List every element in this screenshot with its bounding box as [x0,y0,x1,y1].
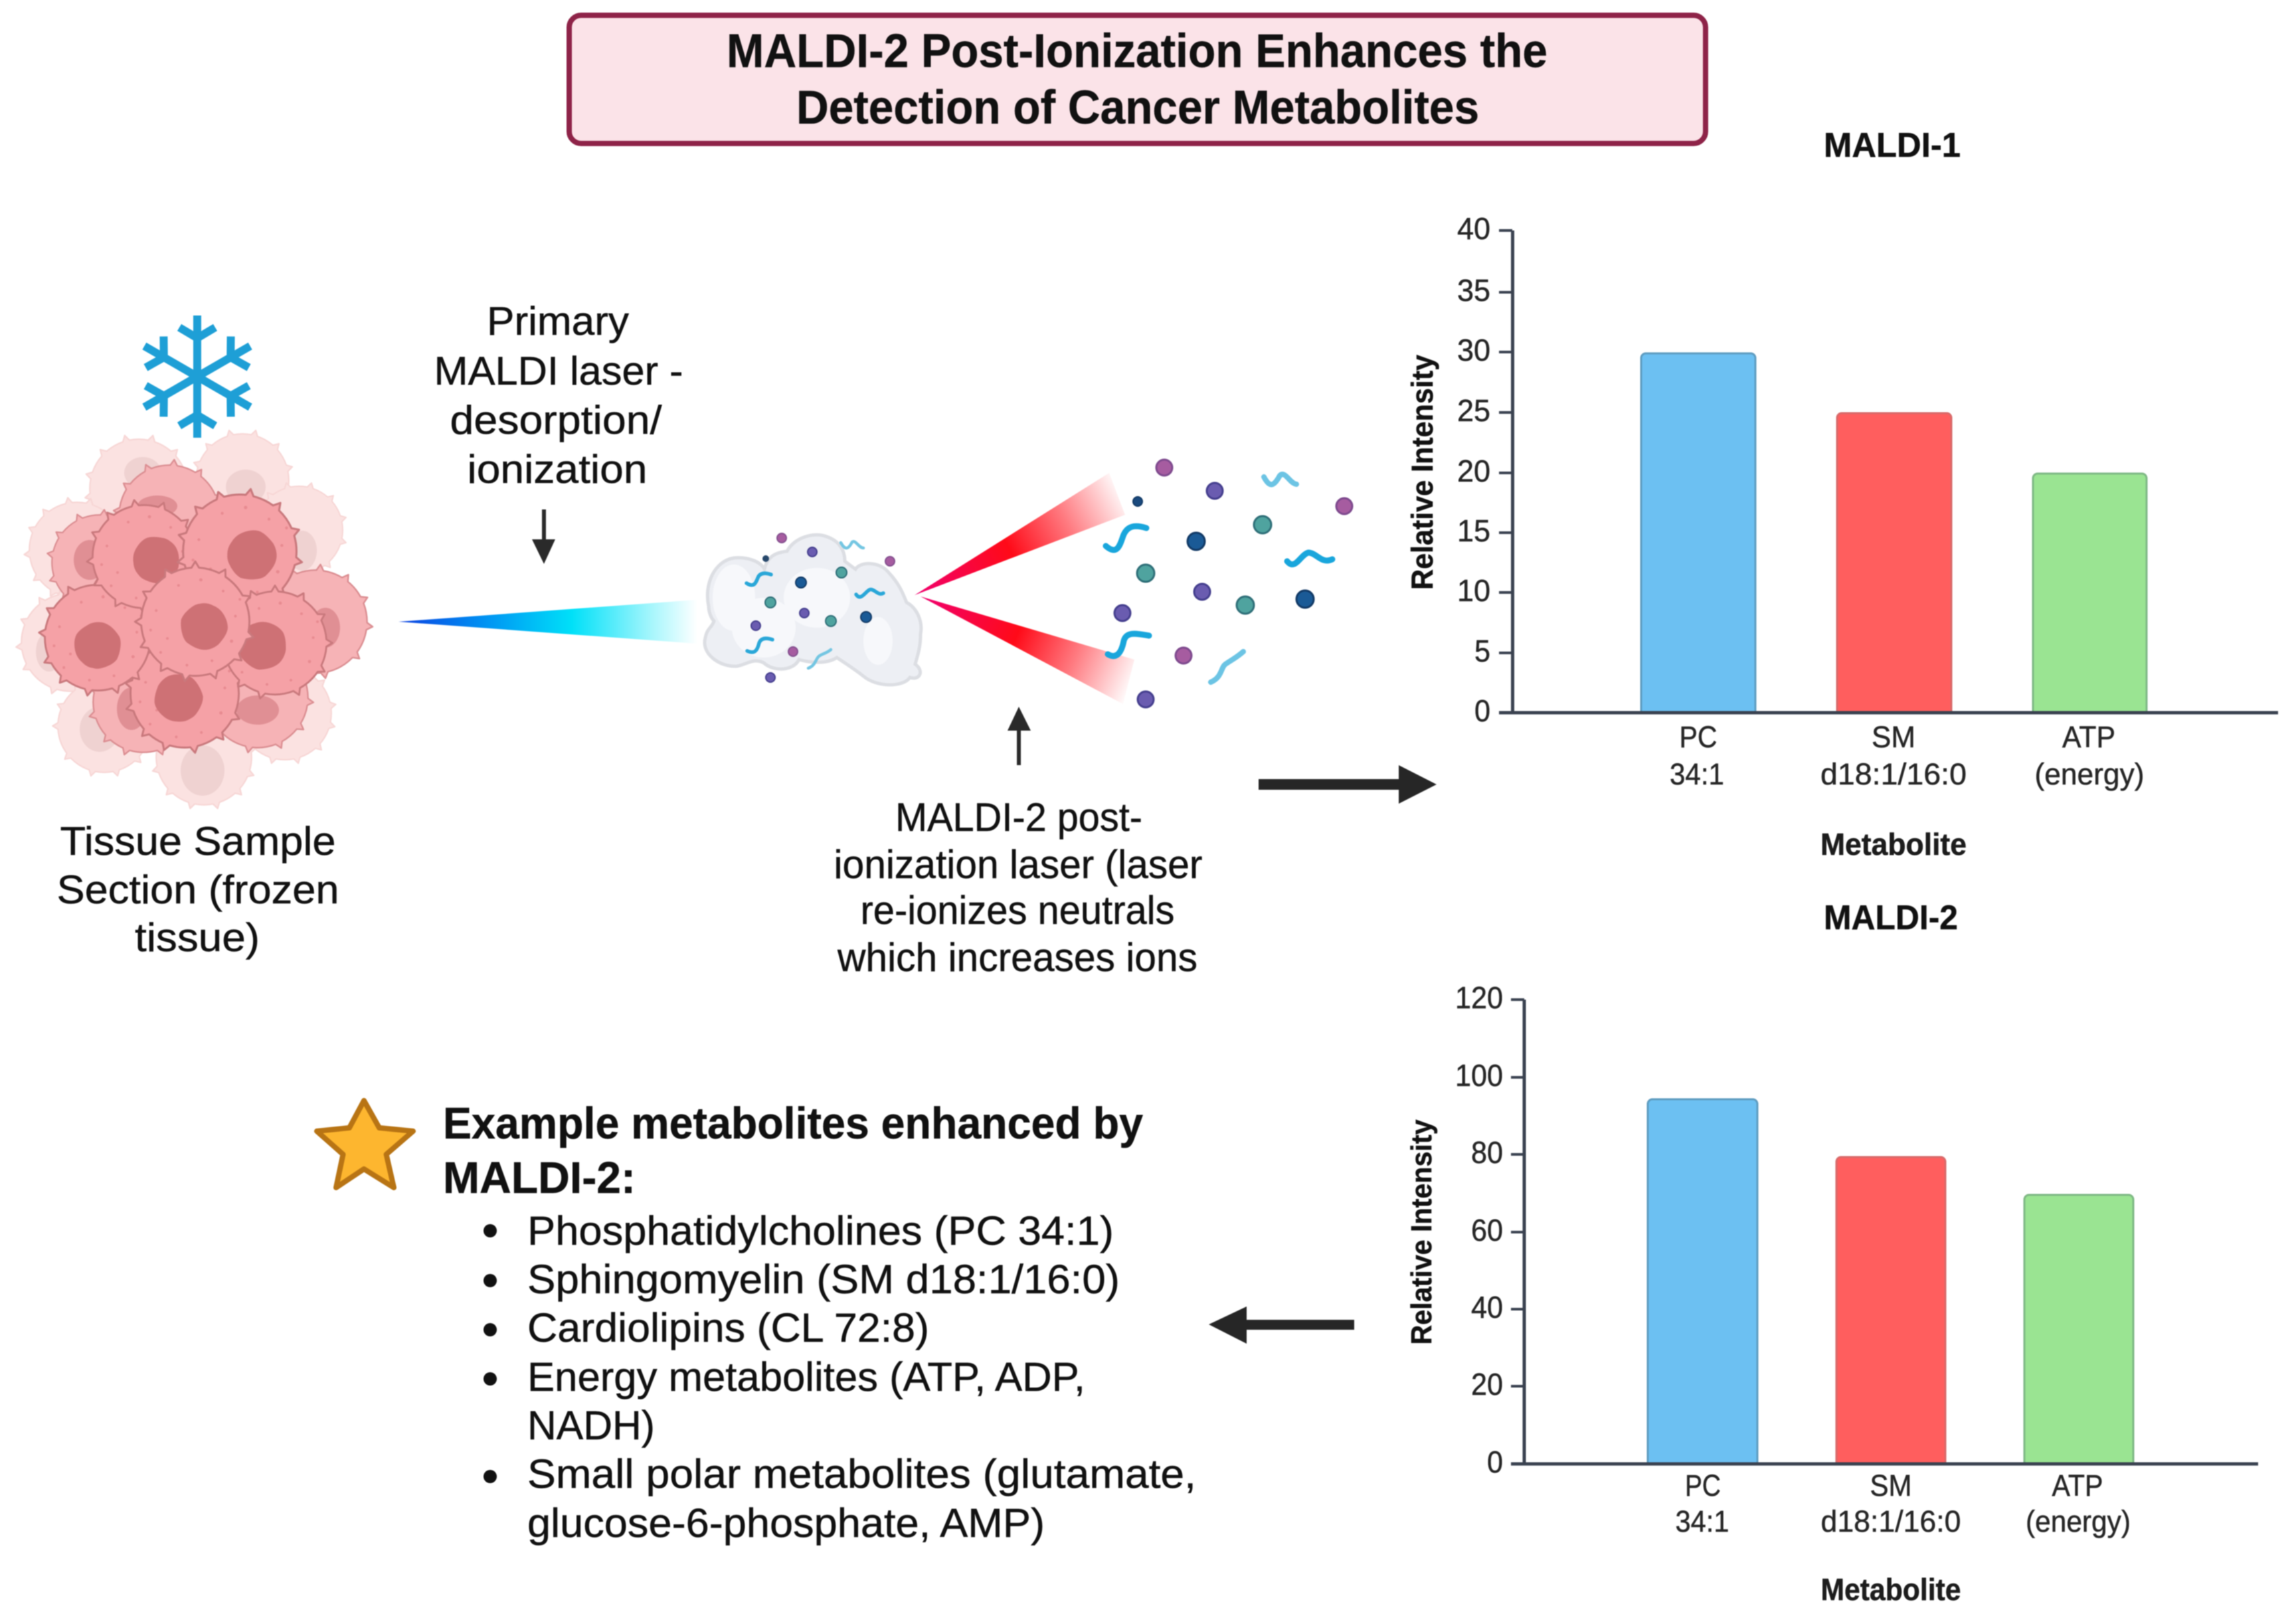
y axis tick labels: 80 [1471,1135,1503,1170]
category labels: (energy) [2035,757,2144,791]
y axis tick labels [1455,980,1503,1479]
left cell [16,556,179,719]
label: tissue sample [57,819,339,960]
label: tissue sample: Section (frozen [57,867,339,912]
list items: Cardiolipins (CL 72:8) [527,1305,929,1350]
list items: NADH) [527,1403,655,1448]
label: MALDI-2 post-ionization laser: which increases ions [837,935,1197,980]
label: tissue sample: Tissue Sample [60,819,336,863]
lower right cell [213,581,337,704]
bars [1648,1099,2133,1464]
list items [527,1208,1196,1546]
y axis tick labels: 40 [1457,211,1490,246]
y axis tick labels: 100 [1455,1058,1503,1093]
red post-ionization laser beams [915,473,1134,704]
list items: Sphingomyelin (SM d18:1/16:0) [527,1257,1120,1302]
y axis tick labels: 25 [1457,393,1490,428]
label: MALDI-2 post-ionization laser: ionization laser (laser [834,842,1202,887]
icon: snowflake [135,315,259,438]
title banner: Detection of Cancer Metabolites [796,82,1479,134]
chart title: MALDI-1 [1824,126,1961,165]
plume cloud with ions [705,533,921,685]
y axis tick labels: 5 [1474,634,1490,668]
x axis title: Metabolite [1821,1572,1961,1607]
chart title: MALDI-2 [1824,899,1958,937]
arrow: up to red laser [1008,707,1031,765]
y axis tick labels: 10 [1457,573,1490,608]
label: primary MALDI laser [434,299,683,492]
x axis title: Metabolite [1820,827,1967,861]
center cell [130,557,260,687]
list heading: Example metabolites enhanced by [443,1099,1143,1148]
arrow: MALDI-2 chart to metabolite list [1209,1306,1354,1344]
bottom cell [111,620,258,766]
ions after post-ionization [1106,460,1352,707]
y axis tick labels: 0 [1474,693,1490,728]
label: tissue sample: tissue) [135,915,260,960]
icon: star [317,1101,413,1188]
category labels [1675,1469,2131,1538]
tumor tissue cell cluster [0,408,389,832]
category labels: d18:1/16:0 [1820,757,1967,791]
chart: MALDI-2 bar chart [1405,899,2258,1607]
title banner: MALDI-2 Post-Ionization Enhances the [727,25,1547,78]
label: MALDI-2 post-ionization laser: re-ionizes neutrals [861,888,1174,933]
y axis tick labels: 35 [1457,273,1490,308]
list items: Energy metabolites (ATP, ADP, [527,1354,1085,1399]
category labels: ATP [2062,720,2115,754]
y axis tick labels: 40 [1471,1290,1503,1324]
category labels: SM [1870,1469,1911,1502]
axes [1511,1000,2258,1464]
label: MALDI-2 post-ionization laser: MALDI-2 post- [895,795,1142,840]
category labels: ATP [2052,1469,2103,1502]
category labels: d18:1/16:0 [1821,1504,1961,1538]
bullets [484,1224,497,1483]
upper left cell [64,477,223,636]
blue primary laser beam [398,600,697,644]
y axis tick labels: 120 [1455,980,1503,1015]
axes [1499,230,2278,713]
y axis tick labels: 20 [1471,1367,1503,1401]
y axis tick labels [1457,211,1490,728]
list heading [443,1099,1143,1203]
upper right cell [163,474,317,628]
y axis tick labels: 0 [1487,1445,1503,1479]
category labels: (energy) [2026,1504,2131,1538]
y axis tick labels: 60 [1471,1213,1503,1247]
label: primary MALDI laser: Primary [487,299,629,343]
y axis title: Relative Intensity [1405,1119,1438,1344]
category labels: PC [1685,1469,1721,1502]
category labels: SM [1872,720,1915,754]
list items: Phosphatidylcholines (PC 34:1) [527,1208,1114,1253]
title banner [569,15,1706,143]
list items: Small polar metabolites (glutamate, [527,1451,1196,1496]
list heading: MALDI-2: [443,1153,636,1203]
y axis title: Relative Intensity [1405,355,1439,590]
category labels: 34:1 [1670,757,1724,791]
list items: glucose-6-phosphate, AMP) [527,1500,1045,1546]
y axis tick labels: 15 [1457,513,1490,548]
metabolite list [443,1099,1196,1546]
label: primary MALDI laser: MALDI laser - [434,349,683,393]
y axis tick labels: 30 [1457,333,1490,367]
arrow: to MALDI-1 chart [1259,765,1437,804]
arrow: down to blue laser [532,509,555,564]
category labels: 34:1 [1675,1504,1729,1538]
label: MALDI-2 post-ionization laser [834,795,1202,980]
category labels [1670,720,2144,791]
y axis tick labels: 20 [1457,454,1490,488]
category labels: PC [1679,720,1718,754]
label: primary MALDI laser: ionization [468,447,647,492]
bars [1641,353,2147,713]
chart: MALDI-1 bar chart [1405,126,2278,861]
label: primary MALDI laser: desorption/ [450,398,662,442]
